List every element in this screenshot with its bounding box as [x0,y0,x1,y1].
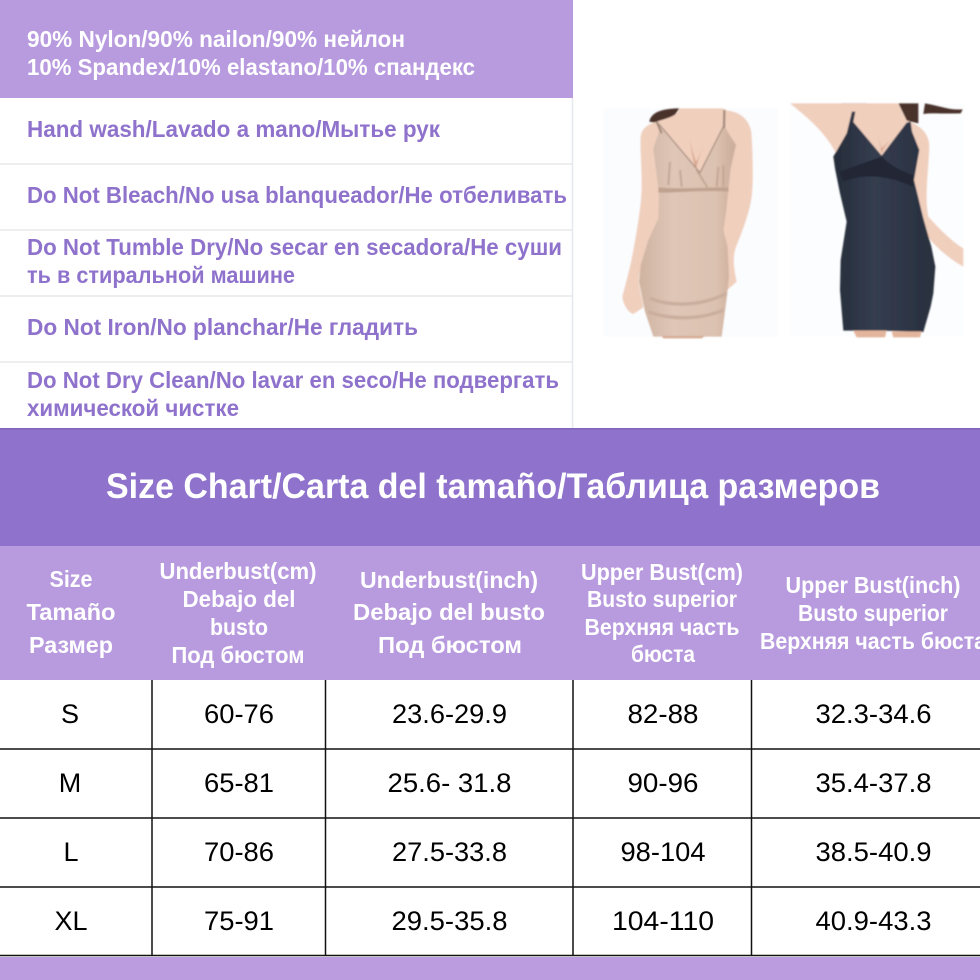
photo: beige slip dress [603,108,778,338]
panel: material composition [0,0,573,98]
panel: care instructions [0,98,573,428]
header: size: Size [50,566,92,592]
header: size [26,566,116,658]
photo: black slip dress [790,103,963,337]
row M: 65-81 [204,768,274,798]
row XL: 29.5-35.8 [392,906,508,936]
header: upper bust cm: бюста [631,641,696,667]
care: hand wash: Hand wash/Lavado a mano/Мытье рук [27,116,440,142]
header: underbust inch [353,567,545,658]
header: underbust cm: Underbust(cm) [160,558,316,584]
care: do not dry clean: Do Not Dry Clean/No lavar en seco/Не подвергать [27,367,559,393]
header: upper bust cm [581,559,743,667]
row XL: 104-110 [612,906,714,936]
row S: 23.6-29.9 [392,699,507,729]
row S: 82-88 [628,699,698,729]
header: upper bust cm: Upper Bust(cm) [581,559,743,585]
row L: 98-104 [620,837,706,867]
header: underbust cm: Под бюстом [172,642,304,668]
care: do not dry clean [27,367,559,421]
row L [63,837,932,867]
row L: 27.5-33.8 [392,837,507,867]
care: do not tumble dry: Do Not Tumble Dry/No secar en secadora/Не суши [27,234,562,260]
row M: 90-96 [628,768,698,798]
care: do not bleach: Do Not Bleach/No usa blanqueador/Не отбеливать [27,182,567,208]
header: upper bust cm: Верхняя часть [584,614,740,640]
panel: material composition: 10% Spandex/10% elastano/10% спандекс [27,54,475,80]
row S: 32.3-34.6 [816,699,932,729]
header: upper bust inch: Upper Bust(inch) [786,572,960,598]
row S: S [61,699,79,729]
row S: 60-76 [204,699,274,729]
header: size: Размер [29,632,113,658]
header: underbust inch: Underbust(inch) [360,567,538,593]
row XL: XL [54,906,88,936]
care: do not tumble dry: ть в стиральной машине [27,262,295,288]
header: underbust inch: Под бюстом [378,632,522,658]
row XL [54,906,932,936]
title banner: Size Chart/Carta del tamaño/Таблица размеров [106,467,880,506]
care: do not tumble dry [27,234,562,288]
row L: L [63,837,79,867]
row S [61,699,932,729]
care: do not dry clean: химической чистке [27,395,239,421]
row M: 35.4-37.8 [816,768,932,798]
title banner [0,428,980,546]
header: underbust cm: busto [210,614,268,640]
header: underbust cm: Debajo del [182,586,296,612]
panel: material composition: 90% Nylon/90% nailon/90% нейлон [27,26,405,52]
header: upper bust inch [760,572,980,654]
row L: 38.5-40.9 [816,837,932,867]
header: upper bust cm: Busto superior [587,586,737,612]
header: upper bust inch: Busto superior [798,600,948,626]
size table body [0,680,980,956]
header: underbust inch: Debajo del busto [353,599,545,625]
row M [59,768,932,798]
care: do not iron: Do Not Iron/No planchar/Не гладить [27,314,418,340]
header: size: Tamaño [26,599,116,625]
row M: 25.6- 31.8 [388,768,512,798]
row XL: 75-91 [204,906,274,936]
row XL: 40.9-43.3 [816,906,932,936]
row L: 70-86 [204,837,274,867]
row M: M [59,768,81,798]
table header row [0,546,980,680]
header: underbust cm [160,558,316,668]
footer band [0,957,980,980]
